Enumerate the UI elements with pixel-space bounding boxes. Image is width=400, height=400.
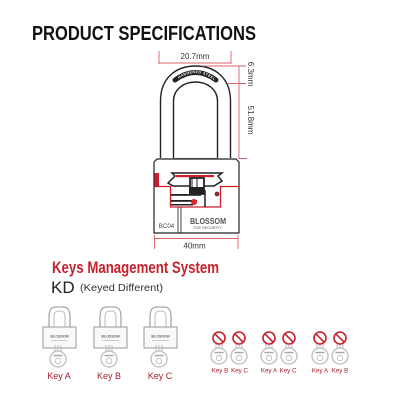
prohibited keys for lock B: Key A xyxy=(261,368,278,374)
lock A with key: Key A xyxy=(47,371,71,381)
dimension: shackle width: 20.7mm xyxy=(181,52,210,61)
KD subheading xyxy=(51,278,163,297)
KD subheading: KD xyxy=(51,278,75,297)
lock B with key: Key B xyxy=(97,371,121,381)
shackle xyxy=(160,65,232,158)
model number: BC04 xyxy=(159,223,175,230)
prohibited keys for lock B: Key C xyxy=(280,368,297,374)
prohibited keys for lock C xyxy=(312,332,348,374)
brand tagline: TOP SECURITY xyxy=(193,225,222,230)
KD subheading: (Keyed Different) xyxy=(80,282,163,294)
prohibited keys for lock A: Key C xyxy=(231,368,248,374)
keys section heading: Keys Management System xyxy=(52,259,219,277)
lock C with key xyxy=(144,307,177,381)
lock A with key xyxy=(43,307,76,381)
padlock diagram xyxy=(153,51,255,250)
lock B with key xyxy=(94,307,127,381)
prohibited keys for lock A xyxy=(211,332,248,374)
prohibited keys for lock B xyxy=(261,332,297,374)
dimension: shackle height: 51.8mm xyxy=(246,106,255,135)
prohibited keys for lock C: Key B xyxy=(332,368,348,374)
dimension: shackle width xyxy=(159,51,231,64)
dimension: shackle height xyxy=(202,62,255,159)
title: PRODUCT SPECIFICATIONS xyxy=(32,23,256,45)
dimension: body width xyxy=(154,235,238,250)
dimension: shackle height: 6.3mm xyxy=(246,62,255,87)
brand: BLOSSOM xyxy=(190,217,226,226)
prohibited keys for lock A: Key B xyxy=(212,368,228,374)
lock body xyxy=(154,159,239,233)
shackle: HARDENED STEEL xyxy=(178,70,215,80)
dimension: body width: 40mm xyxy=(183,242,206,250)
prohibited keys for lock C: Key A xyxy=(312,368,329,374)
lock C with key: Key C xyxy=(148,371,173,381)
